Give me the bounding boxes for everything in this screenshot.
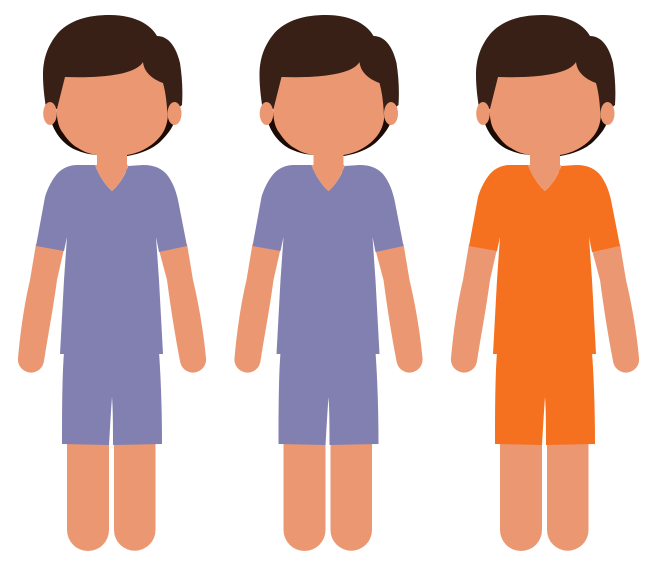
arms	[451, 244, 639, 373]
legs	[284, 440, 372, 551]
figure 1: purple outfit	[18, 15, 206, 551]
t-shirt	[252, 165, 404, 354]
jaw shadow	[268, 112, 390, 156]
ears	[260, 102, 398, 125]
t-shirt	[469, 165, 620, 354]
figure 3: orange outfit	[451, 15, 639, 551]
legs	[500, 440, 588, 551]
hair	[476, 15, 615, 117]
neck	[530, 150, 560, 172]
shorts	[62, 352, 162, 445]
jaw shadow	[52, 112, 174, 156]
jaw shadow	[484, 112, 606, 156]
neckline skin	[528, 165, 561, 191]
hair	[43, 15, 182, 117]
ears	[43, 102, 182, 125]
arms	[234, 244, 423, 373]
face	[56, 60, 168, 155]
neck	[314, 150, 344, 172]
face	[490, 60, 601, 155]
shorts	[495, 352, 595, 445]
neck	[97, 150, 127, 172]
hair	[260, 15, 399, 117]
neckline skin	[95, 165, 128, 191]
t-shirt	[36, 165, 187, 354]
figure 2: purple outfit	[234, 15, 423, 551]
neckline skin	[312, 165, 344, 191]
ears	[476, 102, 614, 125]
shorts	[278, 352, 378, 445]
legs	[67, 440, 156, 551]
face	[273, 60, 384, 155]
arms	[18, 244, 206, 373]
